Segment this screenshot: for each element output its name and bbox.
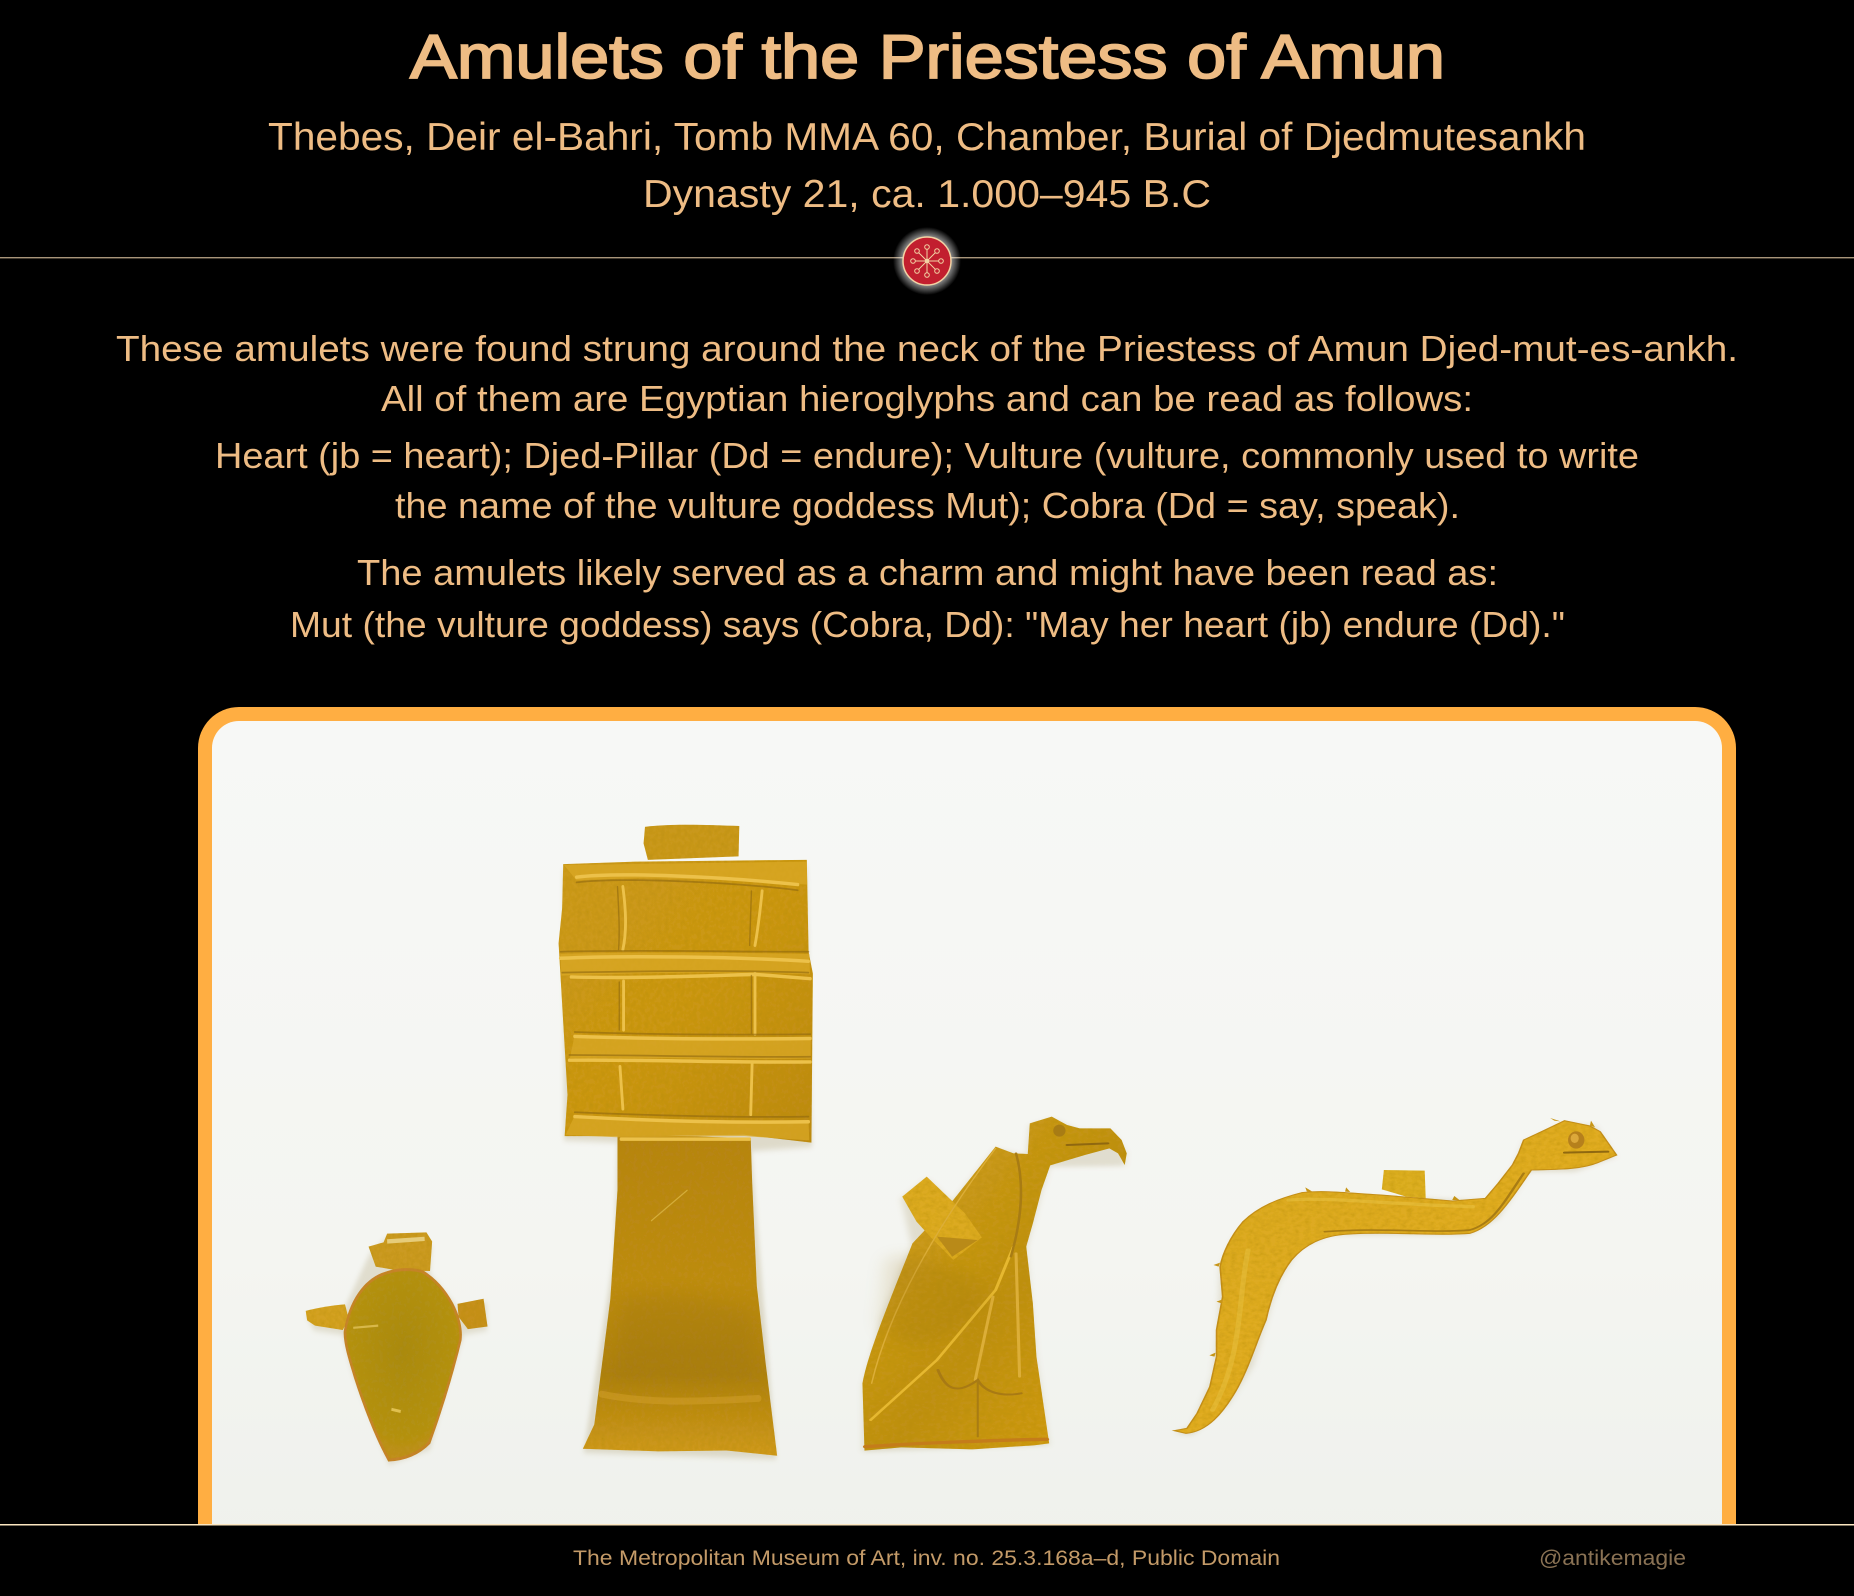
photo panel with orange frame bbox=[198, 707, 1736, 1596]
text block: charm reading: The amulets likely served as a charm and might have been read as: bbox=[357, 552, 1498, 593]
divider line bbox=[0, 257, 1854, 258]
amulet: heart bbox=[306, 1232, 487, 1465]
text block: introduction: All of them are Egyptian hieroglyphs and can be read as follows: bbox=[381, 378, 1473, 419]
text block: introduction: These amulets were found strung around the neck of the Priestess of Amun Djed-mut-es-ankh. bbox=[116, 328, 1738, 369]
amulet: vulture bbox=[862, 1117, 1127, 1452]
text block: hieroglyph readings: Heart (jb = heart); Djed-Pillar (Dd = endure); Vulture (vulture, commonly used to write bbox=[215, 435, 1639, 476]
subtitle: findspot: Thebes, Deir el-Bahri, Tomb MMA 60, Chamber, Burial of Djedmutesankh bbox=[268, 116, 1586, 159]
footer: credit: The Metropolitan Museum of Art, inv. no. 25.3.168a–d, Public Domain bbox=[573, 1547, 1280, 1570]
amulet: cobra bbox=[1174, 1118, 1617, 1435]
footer: handle: @antikemagie bbox=[1539, 1547, 1686, 1570]
amulet: djed pillar bbox=[559, 825, 813, 1459]
text block: hieroglyph readings bbox=[215, 435, 1639, 526]
ridge bands bbox=[560, 862, 811, 1140]
subtitle: date: Dynasty 21, ca. 1.000–945 B.C bbox=[643, 173, 1211, 216]
text block: charm reading bbox=[290, 552, 1565, 645]
text block: introduction bbox=[116, 328, 1738, 419]
footer bar bbox=[0, 1524, 1854, 1596]
icon: red medallion bbox=[893, 227, 961, 295]
text block: charm reading: Mut (the vulture goddess) says (Cobra, Dd): "May her heart (jb) endure (Dd)." bbox=[290, 604, 1565, 645]
title: Amulets of the Priestess of Amun bbox=[410, 23, 1445, 92]
text block: hieroglyph readings: the name of the vulture goddess Mut); Cobra (Dd = say, speak). bbox=[395, 485, 1460, 526]
